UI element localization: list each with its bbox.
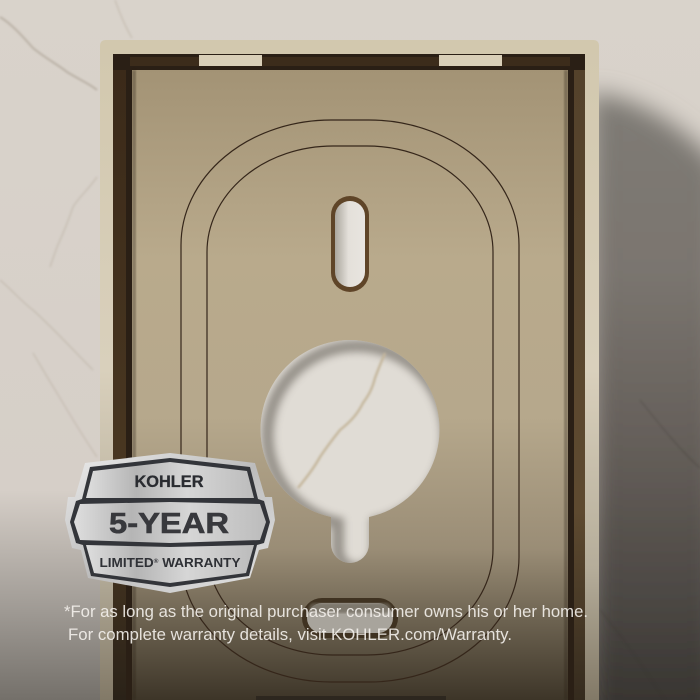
warranty disclaimer text xyxy=(64,602,588,644)
bottom slot cutout xyxy=(302,598,398,638)
back panel xyxy=(132,70,568,700)
outer engraved outline xyxy=(181,120,519,682)
warranty type: ® xyxy=(154,558,159,565)
warranty disclaimer text: *For as long as the original purchaser consumer owns his or her home. xyxy=(64,602,588,621)
warranty badge xyxy=(65,453,275,593)
badge lower panel xyxy=(86,545,254,583)
warranty type: LIMITED xyxy=(100,556,150,570)
warranty type: WARRANTY xyxy=(158,556,241,570)
badge silver rim xyxy=(65,453,275,593)
top slot cutout xyxy=(331,196,369,292)
marble vein xyxy=(298,353,385,488)
keyhole cutout showing marble xyxy=(261,340,446,569)
brand name: KOHLER xyxy=(134,473,204,491)
cast shadow on wall xyxy=(590,92,700,700)
top mounting tab right xyxy=(439,55,502,66)
top mounting tab left xyxy=(199,55,262,66)
bottom dark edge xyxy=(256,696,446,700)
inner engraved outline xyxy=(207,146,493,655)
warranty length: 5-YEAR xyxy=(109,508,229,540)
warranty disclaimer text: For complete warranty details, visit KOHLER.com/Warranty. xyxy=(68,625,512,644)
recess interior xyxy=(113,54,585,700)
badge upper panel xyxy=(86,462,254,498)
inner shadow xyxy=(268,346,446,569)
badge middle panel xyxy=(74,502,266,543)
badge dark frame xyxy=(70,458,270,587)
niche plate frame xyxy=(100,40,599,700)
